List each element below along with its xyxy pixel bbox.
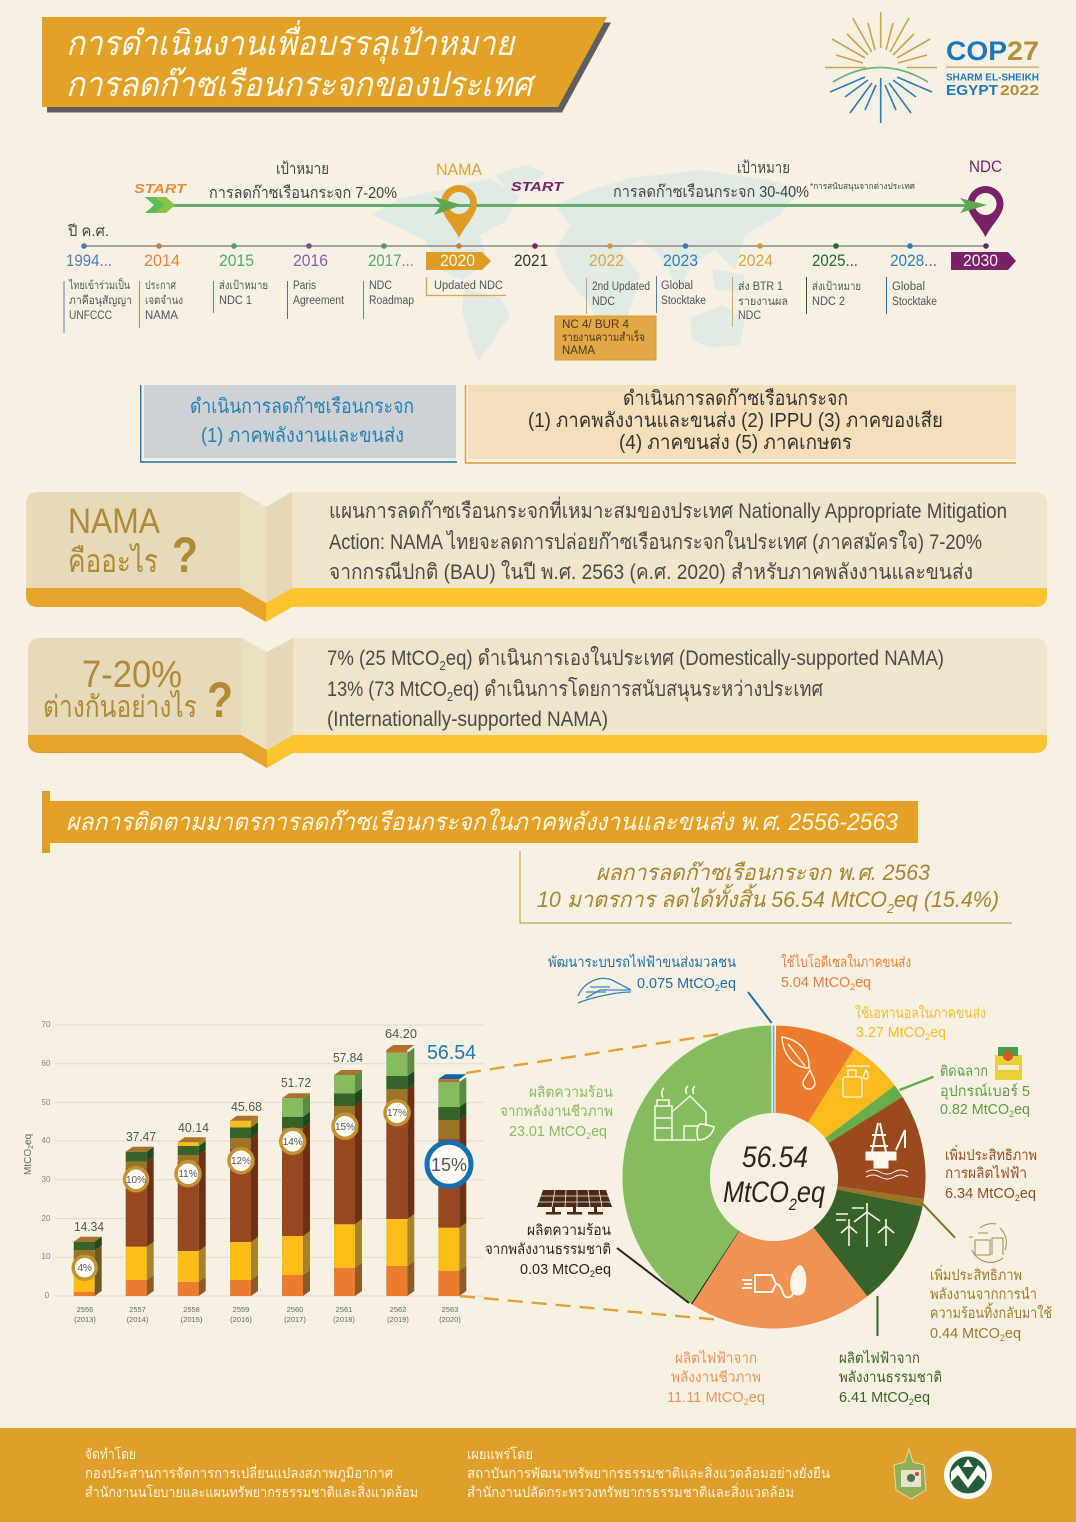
label: mass transit: พัฒนาระบบรถไฟฟ้าขนส่งมวลชน xyxy=(548,953,736,971)
label: renewable electricity xyxy=(839,1296,942,1407)
percent markers: 10% xyxy=(126,1175,146,1186)
box: scope 1 sector xyxy=(141,385,457,462)
timeline notes: ส่งเป้าหมาย xyxy=(812,280,861,293)
bar values: 40.14 xyxy=(178,1121,209,1135)
label: biomass heat: จากพลังงานชีวภาพ xyxy=(500,1103,613,1120)
footer: organizer: กองประสานการจัดการการเปลี่ยนแปลงสภาพภูมิอากาศ xyxy=(85,1464,393,1482)
bar 2556 xyxy=(74,1237,102,1296)
footer: publisher xyxy=(467,1446,830,1500)
section heading banner xyxy=(42,791,918,853)
label: biomass heat: 23.01 MtCO xyxy=(509,1124,587,1140)
COP27 logo xyxy=(825,12,1039,123)
panel heading: ต่างกันอย่างไร xyxy=(43,689,197,724)
NC 4 / BUR 4 callout: รายงานความสำเร็จ xyxy=(562,329,645,344)
timeline notes: NDC xyxy=(738,310,761,322)
y axis: MtCO xyxy=(23,1149,34,1175)
target 30-40%: *การสนับสนุนจากต่างประเทศ xyxy=(810,181,916,192)
y axis: 2 xyxy=(28,1145,35,1149)
label: mass transit: eq xyxy=(720,976,736,992)
x axis labels xyxy=(74,1305,461,1324)
donut total: 56.54 xyxy=(742,1141,808,1174)
panel heading: NAMA xyxy=(68,502,161,541)
bar values: 64.20 xyxy=(385,1027,417,1041)
label: waste heat: พลังงานจากการนำ xyxy=(930,1287,1037,1303)
label: generation efficiency: 6.34 MtCO xyxy=(945,1186,1015,1202)
donut total xyxy=(723,1141,825,1214)
timeline notes: NDC 1 xyxy=(219,295,252,307)
label: biodiesel xyxy=(781,953,911,992)
panel text: Action: NAMA ไทยจะลดการปล่อยก๊าซเรือนกระจกในประเทศ (ภาคสมัครใจ) 7-20% xyxy=(329,530,982,554)
footer: publisher: เผยแพร่โดย xyxy=(467,1446,533,1462)
panel text: 2 xyxy=(439,658,446,673)
footer: publisher: สถาบันการพัฒนาทรัพยากรธรรมชาติและสิ่งแวดล้อมอย่างยั่งยืน xyxy=(467,1464,830,1481)
label: renewable electricity: ผลิตไฟฟ้าจาก xyxy=(839,1349,920,1367)
x axis labels: 2561 xyxy=(336,1305,352,1314)
label: mass transit xyxy=(548,953,772,1023)
target 7-20%: เป้าหมาย xyxy=(276,160,329,178)
icon: leaf and drop xyxy=(782,1037,815,1089)
x axis labels: (2013) xyxy=(74,1315,96,1324)
bar values xyxy=(74,1027,476,1234)
label: ethanol: eq xyxy=(930,1025,946,1041)
label: renewable heat: ผลิตความร้อน xyxy=(527,1222,611,1239)
x axis labels: 2558 xyxy=(183,1305,200,1314)
START label 2014: START xyxy=(134,181,187,196)
timeline years: 2022 xyxy=(589,251,624,270)
title text: การดำเนินงานเพื่อบรรลุเป้าหมาย xyxy=(66,20,516,64)
label: ethanol: 2 xyxy=(925,1032,930,1042)
timeline notes: เจตจำนง xyxy=(145,294,183,307)
bar values: 37.47 xyxy=(126,1130,156,1144)
panel heading xyxy=(68,502,198,583)
label: biomass heat: 2 xyxy=(586,1131,591,1141)
target 30-40% xyxy=(613,159,916,201)
label: waste heat: 0.44 MtCO xyxy=(930,1326,1000,1342)
x axis labels: 2560 xyxy=(287,1305,303,1314)
x axis labels: (2016) xyxy=(230,1315,252,1324)
title text: การลดก๊าซเรือนกระจกของประเทศ xyxy=(66,66,537,104)
title text xyxy=(66,20,537,104)
timeline notes: ส่งเป้าหมาย xyxy=(219,279,268,292)
timeline notes: NDC xyxy=(369,280,392,292)
label: biomass electricity: 2 xyxy=(744,1397,749,1407)
label: biomass heat xyxy=(500,1084,613,1141)
y axis: 10 xyxy=(42,1252,51,1261)
timeline years xyxy=(66,251,1016,270)
timeline notes: ส่ง BTR 1 xyxy=(738,281,783,293)
icon: plug and corn xyxy=(742,1266,805,1297)
label: biomass electricity: eq xyxy=(749,1390,765,1406)
icon: biomass factory xyxy=(655,1086,714,1140)
NDC pin xyxy=(960,157,1004,237)
label: waste heat xyxy=(922,1203,1052,1343)
label: generation efficiency: เพิ่มประสิทธิภาพ xyxy=(945,1145,1037,1164)
label: mass transit: 2 xyxy=(715,983,720,993)
target 30-40%: การลดก๊าซเรือนกระจก 30-40% xyxy=(613,182,809,201)
result summary: ผลการลดก๊าซเรือนกระจก พ.ศ. 2563 xyxy=(596,860,931,885)
timeline notes: NDC 2 xyxy=(812,296,845,308)
bar 2562 xyxy=(386,1045,414,1296)
panel: what is NAMA xyxy=(26,492,1047,622)
footer xyxy=(0,1428,1076,1522)
x axis labels: (2015) xyxy=(181,1315,203,1324)
label: energy label no. 5 xyxy=(900,1047,1030,1119)
bar 2561 xyxy=(334,1070,362,1296)
timeline years: 2016 xyxy=(293,251,328,270)
footer: organizer xyxy=(85,1446,418,1500)
NAMA pin: NAMA xyxy=(436,160,483,179)
label: energy label no. 5: eq xyxy=(1014,1102,1030,1118)
icon: wind turbines xyxy=(836,1203,894,1247)
y axis: 60 xyxy=(42,1059,51,1068)
timeline notes: UNFCCC xyxy=(69,310,112,322)
panel text: eq) ดำเนินการเองในประเทศ (Domestically-supported NAMA) xyxy=(446,646,944,670)
percent markers: 12% xyxy=(231,1156,251,1167)
x axis labels: 2557 xyxy=(129,1305,146,1314)
timeline notes: ไทยเข้าร่วมเป็น xyxy=(68,277,130,292)
timeline notes: Paris xyxy=(293,280,316,292)
box: scope 5 sectors: (4) ภาคขนส่ง (5) ภาคเกษตร xyxy=(619,432,852,454)
label: generation efficiency xyxy=(945,1145,1037,1203)
icon: oil rig xyxy=(866,1123,908,1179)
timeline notes: 2nd Updated xyxy=(592,281,650,293)
panel text: 7% (25 MtCO xyxy=(327,647,454,670)
timeline notes: Updated NDC xyxy=(434,280,503,292)
label: renewable heat: 2 xyxy=(590,1269,595,1279)
percent markers: 11% xyxy=(178,1169,198,1180)
COP27 logo: SHARM EL-SHEIKH xyxy=(946,72,1039,84)
result summary: 2 xyxy=(886,901,895,916)
target 30-40%: เป้าหมาย xyxy=(737,159,790,177)
title banner xyxy=(42,17,611,112)
timeline years: 2014 xyxy=(144,251,180,270)
icon: solar panel xyxy=(537,1190,612,1214)
percent markers: 15% xyxy=(335,1122,355,1133)
target 7-20%: การลดก๊าซเรือนกระจก 7-20% xyxy=(209,183,397,202)
result summary xyxy=(520,851,1012,923)
x axis labels: 2562 xyxy=(390,1305,406,1314)
percent markers: 15% xyxy=(431,1155,467,1175)
COP27 logo: EGYPT xyxy=(946,82,998,99)
icon: waste heat xyxy=(969,1224,1006,1262)
timeline notes: Roadmap xyxy=(369,295,414,307)
timeline notes: Global xyxy=(661,280,693,292)
donut total: MtCO xyxy=(723,1176,801,1209)
timeline years: 2020 xyxy=(440,251,475,270)
timeline years: 2021 xyxy=(514,251,548,270)
label: biodiesel: 5.04 MtCO xyxy=(781,975,851,991)
icon: fuel bottle xyxy=(843,1066,870,1097)
panel heading: คืออะไร xyxy=(68,543,158,579)
panel heading: ? xyxy=(172,527,198,583)
timeline years: 2024 xyxy=(738,251,773,270)
timeline years: 2025... xyxy=(812,251,858,270)
bar 2563 xyxy=(438,1074,466,1296)
x axis labels: (2018) xyxy=(333,1315,355,1324)
panel text xyxy=(329,496,1007,584)
label: biodiesel: ใช้ไบโอดีเซลในภาคขนส่ง xyxy=(781,953,911,971)
x axis labels: 2559 xyxy=(233,1305,249,1314)
timeline notes: NAMA xyxy=(145,310,178,322)
bar 2557 xyxy=(126,1147,154,1296)
label: energy label no. 5: 0.82 MtCO xyxy=(940,1102,1010,1118)
bar values: 56.54 xyxy=(427,1042,476,1064)
box: scope 5 sectors: ดำเนินการลดก๊าซเรือนกระจก xyxy=(623,388,848,410)
logo: institute seal xyxy=(944,1451,992,1499)
timeline years: 2030 xyxy=(963,251,998,270)
box: scope 1 sector: ดำเนินการลดก๊าซเรือนกระจก xyxy=(190,396,414,418)
timeline years: 2015 xyxy=(219,251,254,270)
bar chart xyxy=(23,1020,484,1324)
START label 2021: START xyxy=(511,179,564,194)
label: biomass electricity: ผลิตไฟฟ้าจาก xyxy=(675,1349,757,1367)
COP27 logo: 2022 xyxy=(1000,82,1039,99)
y axis xyxy=(23,1020,484,1300)
timeline axis: ปี ค.ศ. xyxy=(67,223,109,240)
x axis labels: (2019) xyxy=(387,1315,409,1324)
panel text: 2 xyxy=(447,689,453,704)
timeline notes: Agreement xyxy=(293,295,345,307)
box: scope 1 sector: (1) ภาคพลังงานและขนส่ง xyxy=(201,425,404,447)
panel: 7-20% difference xyxy=(28,638,1047,768)
label: waste heat: eq xyxy=(1005,1326,1021,1342)
bar values: 51.72 xyxy=(281,1076,311,1090)
bar 2558 xyxy=(178,1137,206,1296)
panel text: (Internationally-supported NAMA) xyxy=(327,708,608,731)
donut total: 2 xyxy=(788,1195,797,1214)
target 7-20% xyxy=(209,160,397,202)
percent markers xyxy=(73,1101,471,1279)
target arrows xyxy=(145,197,973,213)
percent markers: 4% xyxy=(77,1263,92,1274)
percent markers: 14% xyxy=(283,1137,303,1148)
percent markers: 17% xyxy=(387,1108,407,1119)
donut total: eq xyxy=(797,1176,825,1209)
timeline notes xyxy=(64,276,937,333)
x axis labels: 2563 xyxy=(442,1305,458,1314)
label: renewable electricity: 2 xyxy=(909,1397,914,1407)
label: ethanol: ใช้เอทานอลในภาคขนส่ง xyxy=(855,1004,986,1022)
label: renewable heat: eq xyxy=(595,1262,611,1278)
label: renewable heat xyxy=(485,1190,689,1303)
timeline years: 2028... xyxy=(890,251,937,270)
timeline notes: ประกาศ xyxy=(145,280,177,292)
world map background xyxy=(372,165,800,362)
panel text: จากกรณีปกติ (BAU) ในปี พ.ศ. 2563 (ค.ศ. 2020) สำหรับภาคพลังงานและขนส่ง xyxy=(329,560,973,584)
icon: train xyxy=(578,978,631,1003)
panel heading: ? xyxy=(207,672,233,728)
label: biomass electricity: พลังงานชีวภาพ xyxy=(671,1369,761,1386)
y axis: 40 xyxy=(42,1136,51,1145)
timeline notes: รายงานผล xyxy=(738,296,788,308)
timeline notes: Stocktake xyxy=(892,296,937,308)
label: ethanol: 3.27 MtCO xyxy=(856,1025,926,1041)
result summary: 10 มาตรการ ลดได้ทั้งสิ้น 56.54 MtCO xyxy=(537,887,896,912)
NDC pin: NDC xyxy=(969,157,1002,176)
x axis labels: (2014) xyxy=(127,1315,149,1324)
panel text: eq) ดำเนินการโดยการสนับสนุนระหว่างประเทศ xyxy=(453,677,824,702)
COP27 logo: COP xyxy=(946,36,1007,66)
label: biodiesel: 2 xyxy=(850,982,855,992)
timeline years: 2017... xyxy=(368,251,414,270)
y axis: 20 xyxy=(42,1214,51,1223)
timeline notes: Global xyxy=(892,281,925,293)
label: renewable electricity: 6.41 MtCO xyxy=(839,1390,909,1406)
panel text: 13% (73 MtCO xyxy=(327,678,466,701)
bar 2560 xyxy=(282,1093,310,1296)
panel text: แผนการลดก๊าซเรือนกระจกที่เหมาะสมของประเทศ Nationally Appropriate Mitigation xyxy=(329,496,1007,523)
y axis: 70 xyxy=(42,1020,51,1029)
label: waste heat: 2 xyxy=(1000,1333,1005,1343)
NAMA pin xyxy=(434,160,483,238)
footer: publisher: สำนักงานปลัดกระทรวงทรัพยากรธรรมชาติและสิ่งแวดล้อม xyxy=(467,1483,794,1500)
x axis labels: (2017) xyxy=(284,1315,306,1324)
timeline years: 1994... xyxy=(66,251,112,270)
logo: ministry emblem xyxy=(894,1449,926,1499)
result summary: eq (15.4%) xyxy=(894,887,999,912)
label: mass transit: 0.075 MtCO xyxy=(637,976,715,992)
label: biodiesel: eq xyxy=(855,975,871,991)
dashed connectors xyxy=(460,1034,721,1320)
footer: organizer: จัดทำโดย xyxy=(85,1446,136,1462)
COP27 logo: 27 xyxy=(1007,36,1039,66)
label: ethanol xyxy=(855,1004,986,1042)
y axis: 0 xyxy=(45,1291,50,1300)
label: biomass electricity xyxy=(667,1349,765,1407)
label: biomass electricity: 11.11 MtCO xyxy=(667,1390,743,1406)
timeline years: 2023 xyxy=(663,251,698,270)
panel heading xyxy=(43,654,233,728)
donut chart xyxy=(622,1026,926,1329)
x axis labels: (2020) xyxy=(439,1315,461,1324)
label: generation efficiency: การผลิตไฟฟ้า xyxy=(945,1164,1027,1182)
footer: organizer: สำนักงานนโยบายและแผนทรัพยากรธรรมชาติและสิ่งแวดล้อม xyxy=(85,1483,418,1500)
label: energy label no. 5: 2 xyxy=(1009,1109,1014,1119)
timeline notes: Stocktake xyxy=(661,295,706,307)
bar 2559 xyxy=(230,1116,258,1296)
label: generation efficiency: eq xyxy=(1020,1186,1036,1202)
label: renewable heat: จากพลังงานธรรมชาติ xyxy=(485,1242,611,1258)
y axis: 30 xyxy=(42,1175,51,1184)
section heading banner: ผลการติดตามมาตรการลดก๊าซเรือนกระจกในภาคพลังงานและขนส่ง พ.ศ. 2556-2563 xyxy=(66,808,899,836)
label: renewable electricity: eq xyxy=(914,1390,930,1406)
label: biomass heat: eq xyxy=(591,1124,607,1140)
NC 4 / BUR 4 callout: NC 4/ BUR 4 xyxy=(562,319,630,331)
y axis: 50 xyxy=(42,1098,51,1107)
timeline notes: ภาคีอนุสัญญา xyxy=(69,294,132,307)
label: biomass heat: ผลิตความร้อน xyxy=(529,1084,613,1101)
label: energy label no. 5: ติดฉลาก xyxy=(940,1064,988,1080)
label: renewable heat: 0.03 MtCO xyxy=(520,1262,590,1278)
icon: energy label xyxy=(995,1047,1022,1080)
label: generation efficiency: 2 xyxy=(1015,1193,1020,1203)
NC 4 / BUR 4 callout xyxy=(555,316,656,360)
y axis: eq xyxy=(23,1134,34,1145)
label: waste heat: ความร้อนทิ้งกลับมาใช้ xyxy=(930,1302,1052,1322)
bar values: 14.34 xyxy=(74,1220,104,1234)
panel heading: 7-20% xyxy=(82,654,182,696)
label: waste heat: เพิ่มประสิทธิภาพ xyxy=(930,1265,1022,1284)
bar values: 57.84 xyxy=(333,1051,363,1065)
label: energy label no. 5: อุปกรณ์เบอร์ 5 xyxy=(940,1083,1030,1100)
label: renewable electricity: พลังงานธรรมชาติ xyxy=(839,1370,942,1386)
box: scope 5 sectors: (1) ภาคพลังงานและขนส่ง (2) IPPU (3) ภาคของเสีย xyxy=(528,410,943,432)
box: scope 5 sectors xyxy=(466,385,1016,463)
timeline notes: NDC xyxy=(592,296,615,308)
timeline axis xyxy=(67,223,989,249)
bar values: 45.68 xyxy=(231,1100,262,1114)
panel text xyxy=(327,646,944,731)
x axis labels: 2556 xyxy=(77,1305,93,1314)
NC 4 / BUR 4 callout: NAMA xyxy=(562,345,595,357)
